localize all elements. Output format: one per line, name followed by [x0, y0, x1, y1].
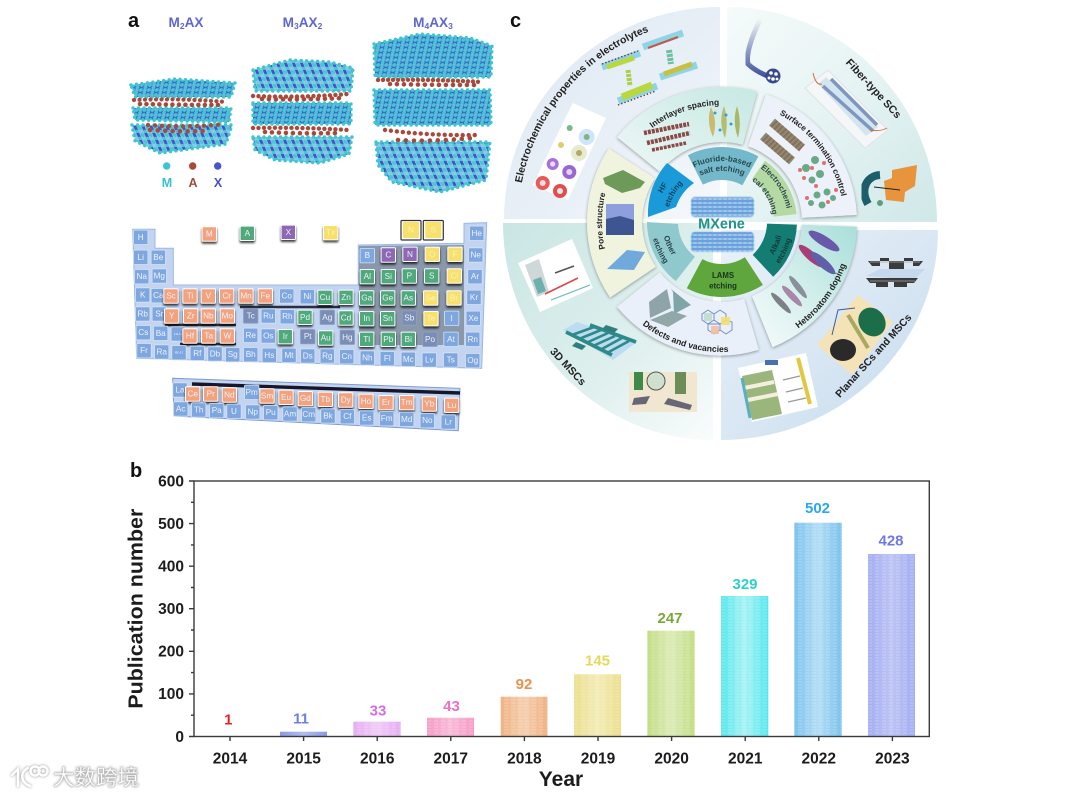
lanthanides row: Pm — [246, 388, 258, 397]
main element grid: Rf — [193, 349, 202, 358]
value labels: 33 — [370, 702, 386, 720]
bars — [207, 523, 915, 736]
lanthanides row: Ho — [361, 397, 372, 406]
main element grid: Tc — [247, 312, 255, 320]
main element grid: Au — [321, 334, 331, 342]
illustration: fiber — [748, 20, 780, 84]
main element grid: Ir — [283, 332, 288, 341]
heading: M3AX2: M — [283, 15, 294, 30]
legend chips: Tx — [326, 228, 335, 237]
value labels: 428 — [878, 532, 904, 550]
main element grid: F — [452, 250, 458, 259]
lanthanides row — [173, 383, 459, 412]
heading: M4AX3: 3 — [448, 21, 453, 31]
legend chips: X — [286, 228, 292, 237]
illustration: electrochemical device card — [738, 353, 818, 422]
y axis labels — [158, 474, 184, 746]
main element grid: Xe — [468, 314, 479, 323]
actinides row: Am — [284, 410, 296, 418]
crystal: M4AX3 — [374, 34, 492, 192]
main element grid: Og — [467, 356, 479, 365]
sector: electrochemical etching: Electrochemi — [761, 164, 792, 208]
main element grid: Nb — [203, 312, 214, 320]
sector: fluoride-based salt etching: Fluoride-based — [692, 155, 752, 168]
main element grid: Cr — [222, 292, 231, 300]
heading: M3AX2: 2 — [318, 21, 323, 31]
x axis labels: 2014 — [213, 750, 248, 768]
title: MXene: MXene — [698, 216, 745, 232]
main element grid: S — [429, 272, 435, 280]
main element grid: Pd — [300, 313, 310, 322]
illustration: porous blocks — [603, 170, 645, 270]
lanthanides row: Eu — [281, 393, 291, 402]
sector: LAMS etching: etching — [709, 282, 737, 290]
illustration: MXene layers bottom — [691, 232, 754, 252]
panel label a: a — [128, 10, 140, 32]
watermark text: 大数跨境 — [53, 761, 139, 792]
sector: heteroatom doping: Heteroatom doping — [795, 264, 847, 328]
sector: defects and vacancies — [616, 272, 760, 358]
illustration: asymmetric cell diagram — [817, 295, 893, 375]
value labels: 247 — [657, 610, 683, 627]
sector: alkali etching: etching — [776, 238, 792, 264]
main element grid: Ni — [303, 292, 311, 301]
sector: defects and vacancies: Defects and vacancies — [642, 320, 728, 352]
heading: M4AX3: AX — [429, 15, 448, 30]
main element grid: Bi — [405, 335, 412, 344]
actinides row: No — [422, 416, 433, 425]
actinides row: U — [231, 407, 237, 416]
main element grid: Co — [281, 292, 292, 300]
y axis labels: 100 — [158, 686, 184, 703]
main element grid: C — [385, 250, 391, 260]
legend chips: S — [431, 226, 437, 234]
main element grid: Li — [138, 253, 144, 262]
main element grid: Ga — [361, 294, 373, 302]
illustration: printing nozzle card — [518, 239, 593, 312]
main element grid: Ts — [447, 356, 455, 364]
main element grid: Kr — [470, 293, 478, 302]
main element grid: Fl — [384, 354, 391, 363]
sector: interlayer spacing: Interlayer spacing — [649, 100, 719, 128]
heading: M2AX: 2 — [180, 21, 185, 31]
legend: M A X atoms: X — [214, 176, 223, 190]
sector: HF etching: HF — [658, 182, 666, 193]
actinides row: Cf — [343, 412, 352, 421]
illustration: stacked planar electrodes — [866, 258, 925, 287]
sector: surface termination control: Surface termination control — [780, 110, 847, 196]
x axis labels: 2019 — [581, 750, 616, 768]
sector: other etching: etching — [653, 238, 668, 264]
value labels: 329 — [732, 576, 758, 593]
main element grid: Fe — [261, 292, 271, 300]
main element grid: Re — [245, 331, 256, 340]
main element grid: Rb — [137, 310, 148, 318]
main element grid: Ne — [470, 250, 481, 260]
axes frame and ticks — [189, 481, 929, 741]
legend: M A X atoms: A — [188, 176, 198, 190]
lanthanides row: Dy — [341, 396, 352, 404]
main element grid: Ds — [303, 352, 313, 360]
panel label c: c — [510, 10, 521, 32]
legend chips: M — [206, 230, 213, 238]
lanthanides row: La — [175, 386, 185, 394]
legend chips: N — [408, 226, 414, 234]
main element grid: Rg — [322, 352, 333, 360]
heading: M2AX: M — [169, 15, 180, 30]
illustration: defect cube and lattice — [649, 289, 732, 334]
sector: fluoride-based salt etching: salt etching — [700, 166, 745, 176]
periodic table — [133, 220, 487, 431]
main element grid: Rn — [467, 335, 478, 344]
lanthanides row: Nd — [224, 390, 235, 400]
outer quadrant: 3D MSCs — [503, 223, 713, 440]
outer quadrant: planar SCs and MSCs — [721, 230, 938, 440]
legend chips — [202, 220, 443, 241]
main element grid: Si — [385, 272, 392, 281]
main element grid: Zr — [187, 312, 195, 320]
main element grid: Ca — [153, 291, 164, 300]
main element grid: Sb — [404, 314, 415, 322]
main element grid: W — [223, 332, 231, 340]
outer quadrant: electrochemical properties in electrolytes: Electrochemical properties in electrolytes — [514, 27, 648, 182]
outer quadrant: planar SCs and MSCs: Planar SCs and MSCs — [834, 312, 915, 400]
center: MXene — [691, 197, 754, 252]
actinides row: Bk — [323, 412, 334, 420]
x axis labels: 2022 — [802, 750, 836, 768]
actinides row: Cm — [302, 410, 315, 419]
main element grid: Tl — [363, 335, 370, 344]
actinides row: Pa — [212, 406, 222, 415]
actinides row: Es — [362, 414, 371, 422]
value labels: 1 — [224, 712, 232, 728]
heading: M3AX2: AX — [299, 15, 318, 30]
shadow edge on lanthanide row — [192, 384, 460, 393]
sector: pore structure — [585, 148, 657, 300]
main element grid: Na — [136, 272, 147, 281]
main element grid: Sg — [228, 350, 238, 359]
sector: LAMS etching — [687, 257, 763, 297]
dark gaps behind raised right block — [359, 245, 464, 345]
main element grid: Os — [263, 332, 274, 340]
main element grid: Ba — [156, 329, 166, 338]
main element grid: Hf — [186, 332, 195, 340]
actinides row: Th — [194, 406, 204, 414]
lanthanides row: Tb — [321, 395, 331, 404]
actinides row: Np — [247, 408, 258, 416]
outer quadrant: electrochemical properties in electrolytes — [504, 7, 720, 219]
main element grid: Cs — [138, 328, 148, 337]
main element grid: Hs — [264, 351, 274, 360]
main element grid: Mo — [222, 312, 233, 320]
x axis labels: 2017 — [434, 750, 468, 768]
sector: surface termination control — [746, 94, 858, 220]
value labels: 43 — [443, 698, 460, 715]
main element grid: As — [404, 294, 413, 302]
main element grid: I — [451, 314, 453, 323]
middle ring: sectors — [585, 86, 859, 358]
main element grid: Te — [427, 314, 436, 323]
main element grid: Nh — [362, 354, 373, 362]
sector: pore structure: Pore structure — [596, 192, 606, 250]
main element grid: Mc — [403, 355, 414, 364]
main element grid: Ag — [322, 313, 333, 322]
heading: M3AX2: 3 — [294, 21, 299, 31]
main element grid: Se — [426, 294, 436, 302]
crystal: M2AX — [131, 79, 235, 153]
sector: alkali etching — [752, 224, 797, 277]
actinides row: Lr — [445, 418, 452, 426]
main element grid: Bh — [246, 350, 256, 359]
x axis title: Year — [539, 768, 583, 791]
y axis title: Publication number — [125, 509, 148, 709]
x axis labels: 2023 — [875, 750, 910, 768]
actinides row: Pu — [266, 408, 276, 417]
main element grid: Zn — [341, 293, 351, 302]
x axis labels — [213, 750, 910, 768]
lanthanides row: Lu — [447, 401, 457, 410]
main element grid: B — [365, 251, 371, 260]
value labels: 11 — [293, 710, 309, 728]
main element grid: Rh — [282, 312, 293, 321]
main element grid: He — [471, 229, 482, 238]
lanthanides row: Er — [382, 398, 390, 407]
sector: other etching — [647, 222, 695, 281]
watermark logo — [12, 766, 48, 786]
value labels: 502 — [805, 500, 830, 517]
lanthanides row: Sm — [261, 392, 273, 400]
actinides row: Md — [401, 415, 413, 424]
main element grid: Hg — [342, 333, 353, 342]
x axis labels: 2015 — [286, 750, 321, 768]
main element grid: Fr — [140, 346, 148, 355]
heading: M4AX3: 4 — [424, 21, 429, 31]
panel b: publication number bar chart — [125, 474, 929, 791]
outer quadrant: fiber-type SCs — [727, 7, 937, 222]
heading: M2AX: AX — [185, 15, 203, 30]
main element grid: Ar — [471, 272, 479, 281]
illustration: layered electrolyte structures — [602, 33, 697, 105]
lanthanides row: Yb — [424, 400, 435, 408]
main element grid: N — [407, 250, 413, 259]
outer quadrant: 3D MSCs: 3D MSCs — [547, 346, 588, 388]
main element grid: Ti — [187, 292, 193, 300]
main element grid: Ru — [263, 312, 274, 320]
main element grid: Al — [364, 272, 371, 281]
main element grid: In — [363, 314, 371, 323]
actinides row: Ac — [176, 404, 185, 414]
main element grid: Y — [169, 312, 175, 320]
illustration: 3D comb device — [563, 322, 637, 360]
lanthanides row: Tm — [401, 398, 413, 407]
sector: LAMS etching: LAMS — [712, 271, 734, 280]
illustration: orange electrode — [864, 165, 917, 206]
panel a: MAX phase crystal structures — [131, 15, 492, 192]
y axis labels: 600 — [158, 474, 184, 490]
value labels — [224, 500, 904, 728]
illustration: MXene layers top — [691, 197, 754, 217]
main element grid: Cn — [341, 352, 352, 361]
legend: M A X atoms — [162, 162, 223, 190]
value labels: 145 — [585, 652, 610, 670]
legend chips: A — [245, 229, 251, 238]
dark gap under raised transition metals — [165, 307, 340, 344]
main element grid: P — [407, 272, 413, 280]
main element grid: V — [206, 292, 212, 300]
main element grid: Ac-Lr — [175, 351, 184, 355]
y axis labels: 0 — [175, 729, 184, 746]
illustration: terminated MXene ribbons — [763, 122, 838, 208]
y axis labels: 300 — [158, 601, 184, 618]
x axis labels: 2016 — [360, 750, 395, 768]
lanthanides row: Pr — [207, 390, 215, 398]
y axis labels: 500 — [158, 516, 184, 533]
main element grid: Po — [425, 335, 435, 344]
sector: heteroatom doping — [750, 224, 859, 350]
main element grid: Mn — [240, 292, 252, 300]
main element grid: O — [429, 250, 435, 259]
lanthanides row: Ce — [187, 390, 198, 398]
illustration: layered stacks and leaves — [644, 106, 740, 150]
sector: electrochemical etching — [752, 160, 796, 217]
illustration: fiber device — [805, 70, 888, 148]
sector: interlayer spacing — [616, 86, 758, 174]
main element grid: K — [140, 290, 146, 300]
inner ring: etching methods — [647, 147, 797, 297]
main element grid: Pb — [383, 335, 394, 344]
panel label b: b — [130, 460, 142, 482]
value labels: 92 — [516, 676, 532, 693]
main element grid: Mg — [154, 272, 165, 280]
lanthanides row: Gd — [300, 394, 311, 403]
illustration: 3D printing photo — [629, 372, 697, 412]
main element grid: Lv — [425, 356, 435, 364]
actinides row — [174, 402, 455, 429]
main element grid: Cu — [320, 293, 331, 302]
legend: M A X atoms: M — [162, 176, 172, 190]
y axis labels: 400 — [158, 558, 184, 576]
y axis labels: 200 — [158, 644, 184, 660]
x axis labels: 2020 — [654, 750, 689, 768]
outer quadrant: fiber-type SCs: Fiber-type SCs — [843, 57, 903, 121]
main element grid: H — [138, 233, 144, 242]
sector: HF etching — [648, 163, 694, 217]
main element grid: Ra — [156, 348, 167, 356]
main element grid: Sr — [155, 310, 164, 318]
main element grid — [134, 226, 484, 368]
crystal: M3AX2 — [253, 60, 353, 163]
watermark — [12, 761, 139, 792]
panel c: MXene circular diagram — [503, 7, 938, 440]
illustration: ion card — [533, 103, 606, 200]
sector: fluoride-based salt etching — [688, 147, 758, 186]
sector: alkali etching: Alkali — [770, 235, 782, 255]
main element grid: At — [447, 335, 456, 344]
main element grid: Br — [450, 294, 458, 302]
main element grid: Be — [153, 253, 164, 262]
heading: M4AX3: M — [413, 15, 424, 30]
x axis labels: 2018 — [507, 750, 542, 768]
sector: other etching: Other — [664, 236, 676, 254]
main element grid: Mt — [284, 351, 294, 360]
main element grid: Sn — [383, 314, 393, 323]
periodic table backing slab — [133, 223, 487, 368]
main element grid: Db — [210, 350, 221, 358]
illustration: doped layers — [769, 227, 842, 315]
main element grid: Sc — [166, 292, 176, 300]
main element grid: La-Lu — [174, 332, 183, 336]
sector: electrochemical etching: cal etching — [752, 178, 776, 214]
lanthanide and actinide backing slab — [173, 378, 460, 431]
main element grid: Cd — [341, 314, 352, 322]
main element grid: Ta — [204, 332, 213, 340]
main element grid: Ge — [382, 294, 394, 302]
sector: HF etching: etching — [666, 181, 683, 206]
x axis labels: 2021 — [728, 750, 763, 768]
main element grid: Pt — [304, 332, 312, 341]
actinides row: Fm — [381, 414, 393, 423]
main element grid: Cl — [450, 272, 458, 280]
